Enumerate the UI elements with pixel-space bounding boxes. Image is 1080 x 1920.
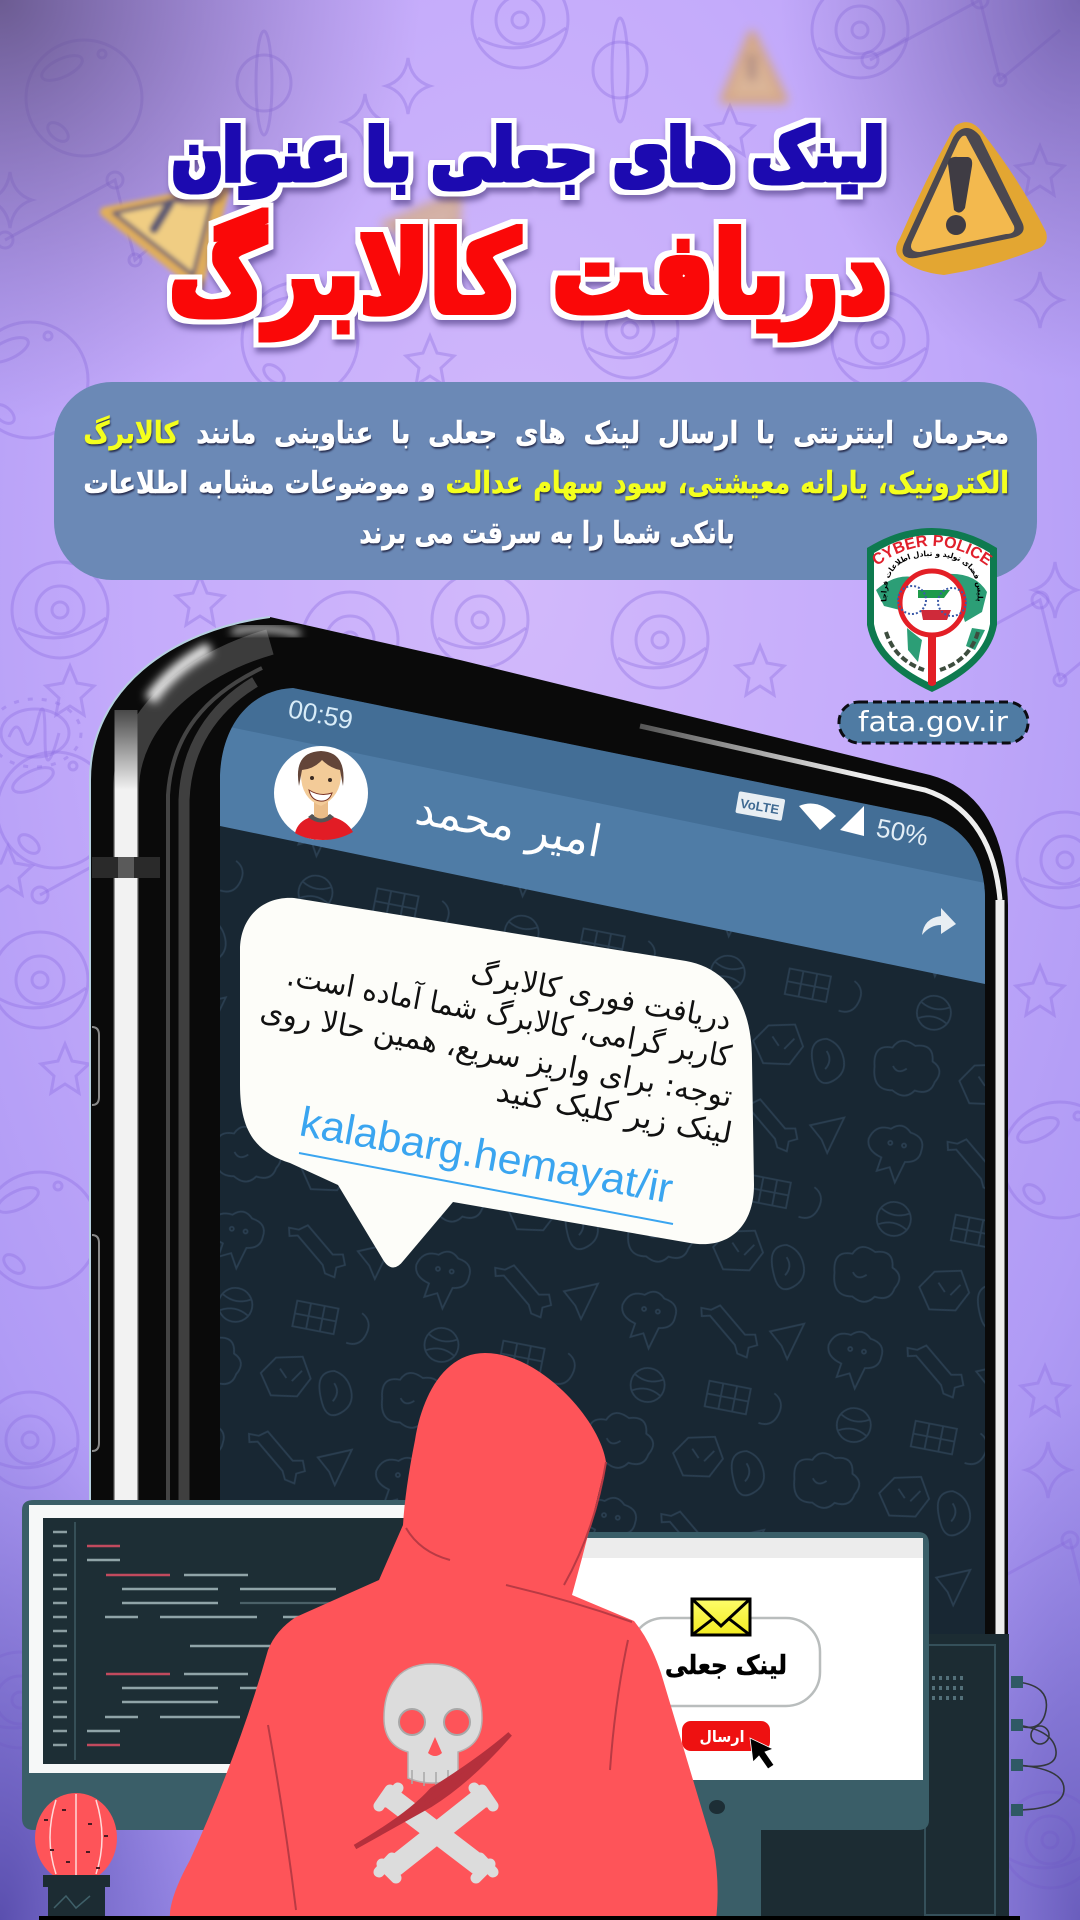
message text: توجه: برای واریز سریع، همین حالا روی — [258, 993, 735, 1115]
badge arc text — [878, 546, 986, 565]
icon: blurred warning sign top — [724, 34, 784, 100]
monitor frame — [22, 1500, 929, 1830]
hacker in red hoodie — [170, 1353, 718, 1920]
message text: دریافت فوری کالابرگ — [468, 954, 734, 1038]
magnifier — [898, 571, 966, 686]
icon: share arrow — [922, 908, 956, 935]
link box: لینک جعلی — [665, 1651, 787, 1681]
cyber police badge: پلیس فضای تولید و تبادل اطلاعات فراجا — [880, 550, 984, 602]
monitor button — [709, 1800, 725, 1814]
send button — [682, 1721, 770, 1751]
text block: description lines — [83, 415, 1009, 554]
icon: signal — [840, 806, 864, 836]
icon: VoLTE — [735, 791, 785, 821]
link box — [630, 1618, 820, 1706]
title line one: لینک های جعلی با عنوان — [172, 113, 884, 198]
message text: کاربر گرامی، کالابرگ شما آماده است. — [284, 957, 735, 1075]
screen — [215, 680, 990, 1650]
text block: description lines: الکترونیک، یارانه معیشتی، سود سهام عدالت و موضوعات مشابه اطلاعات — [83, 466, 1009, 501]
text block: description lines: مجرمان اینترنتی با ارسال لینک های جعلی با عناوینی مانند کالابرگ — [83, 416, 1009, 451]
icon: envelope — [692, 1599, 750, 1635]
bottom line — [39, 1916, 1020, 1920]
avatar — [274, 746, 368, 840]
monitor — [22, 1500, 929, 1918]
icon: warning sign — [896, 122, 1047, 275]
icon: cursor — [750, 1738, 774, 1769]
icon: wifi — [799, 804, 836, 830]
tower cables — [1016, 1682, 1064, 1810]
icon: blurred warning sign left — [105, 188, 225, 286]
title line two: دریافت کالابرگ — [169, 209, 887, 339]
fake link: kalabarg.hemayat/ir — [296, 1098, 677, 1212]
monitor screen right: fake link form — [470, 1538, 923, 1780]
monitor stand — [296, 1826, 761, 1918]
site address pill — [839, 702, 1028, 743]
chat bubble — [240, 898, 754, 1268]
battery percent: 50% — [874, 812, 931, 852]
cyber police badge: CYBER POLICE — [872, 534, 993, 566]
site address pill: fata.gov.ir — [858, 705, 1009, 738]
text block: description lines: بانکی شما را به سرقت می برند — [359, 516, 735, 551]
message text: لینک زیر کلیک کنید — [494, 1074, 735, 1152]
laurel — [886, 632, 978, 670]
phone body — [90, 617, 1008, 1640]
computer tower — [761, 1634, 1064, 1920]
slash mark — [355, 1734, 510, 1847]
chat header — [215, 724, 990, 985]
icon: crossed bones — [379, 1788, 493, 1878]
phone — [90, 617, 1008, 1650]
message text — [258, 954, 735, 1152]
icon: VoLTE: VoLTE — [739, 796, 781, 817]
icon: blurred warning sign centre — [385, 195, 458, 255]
icon: skull — [384, 1664, 482, 1786]
panel: description of the scam — [54, 382, 1037, 580]
contact name: امیر محمد — [412, 784, 606, 868]
cactus in pot — [35, 1793, 117, 1917]
cyber police badge — [867, 528, 997, 692]
monitor screen left with code — [29, 1505, 469, 1773]
status bar — [215, 680, 990, 900]
send button: ارسال — [700, 1727, 744, 1746]
status time: 00:59 — [286, 693, 355, 735]
